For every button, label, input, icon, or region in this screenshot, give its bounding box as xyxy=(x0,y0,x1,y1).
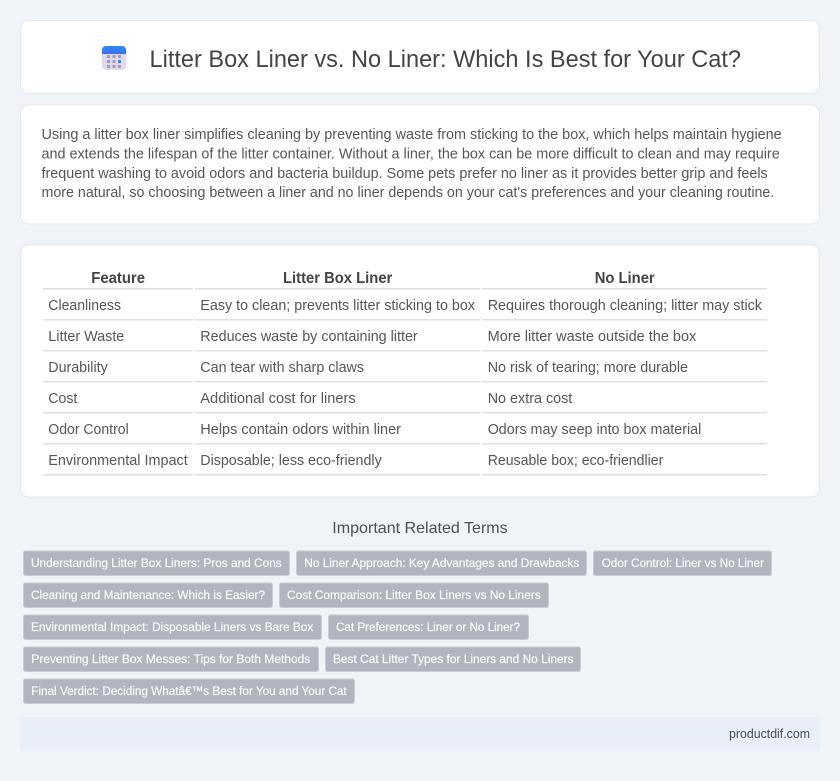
row: cost: Additional cost for liners xyxy=(200,391,356,407)
intro text: and extends the lifespan of the litter container. Without a liner, the box can be more difficult to clean and may require xyxy=(42,146,780,162)
tag xyxy=(24,551,290,576)
intro text xyxy=(42,127,782,201)
row: environmental impact: Reusable box; eco-friendlier xyxy=(488,453,663,469)
tag: Odor Control: Liner vs No Liner xyxy=(602,556,764,570)
tag xyxy=(280,583,548,608)
row: litter waste: Reduces waste by containing litter xyxy=(200,329,418,345)
row: litter waste: Litter Waste xyxy=(48,329,124,345)
heading: important related terms: Important Related Terms xyxy=(332,520,508,537)
tag: Environmental Impact: Disposable Liners vs Bare Box xyxy=(31,620,314,634)
intro text: Using a litter box liner simplifies cleaning by preventing waste from sticking to the box, which helps maintain hygiene xyxy=(42,127,782,143)
row: cost: Cost xyxy=(48,391,77,407)
table header row xyxy=(91,270,655,287)
row: odor control: Odors may seep into box material xyxy=(488,422,701,438)
row: environmental impact xyxy=(48,453,663,469)
row: odor control: Odor Control xyxy=(48,422,129,438)
tag: Final Verdict: Deciding Whatâ€™s Best for You and Your Cat xyxy=(31,684,347,698)
row: durability: Can tear with sharp claws xyxy=(200,360,364,376)
tag: Cat Preferences: Liner or No Liner? xyxy=(336,620,520,634)
row: odor control: Helps contain odors within liner xyxy=(200,422,401,438)
row: cost xyxy=(48,391,572,407)
tag xyxy=(24,679,354,704)
panel: introduction xyxy=(20,105,820,224)
tag xyxy=(594,551,772,576)
tag xyxy=(24,583,272,608)
row: odor control xyxy=(48,422,701,438)
row: cleanliness: Requires thorough cleaning; litter may stick xyxy=(488,298,763,314)
tag: Preventing Litter Box Messes: Tips for Both Methods xyxy=(31,652,310,666)
tag xyxy=(24,615,322,640)
title: Litter Box Liner vs. No Liner: Which Is Best for Your Cat? xyxy=(150,46,741,73)
intro text: frequent washing to avoid odors and bacteria buildup. Some pets prefer no liner as it provides better grip and feels xyxy=(42,166,768,182)
table header row: No Liner xyxy=(595,270,655,287)
tag xyxy=(326,647,580,672)
row: durability xyxy=(48,360,688,376)
row: litter waste: More litter waste outside the box xyxy=(488,329,697,345)
related term tags xyxy=(24,551,772,704)
tag xyxy=(296,551,586,576)
row: environmental impact: Disposable; less eco-friendly xyxy=(200,453,382,469)
row: litter waste xyxy=(48,329,697,345)
table header row: Feature xyxy=(91,270,145,287)
footer xyxy=(20,717,820,751)
row: cleanliness xyxy=(48,298,763,314)
tag xyxy=(328,615,528,640)
tag: Cost Comparison: Litter Box Liners vs No Liners xyxy=(287,588,541,602)
footer text: productdif.com xyxy=(729,727,810,741)
panel: header xyxy=(20,20,820,94)
intro text: more natural, so choosing between a liner and no liner depends on your cat's preferences and your cleaning routine. xyxy=(42,185,774,201)
tag: No Liner Approach: Key Advantages and Drawbacks xyxy=(304,556,579,570)
tag xyxy=(24,647,318,672)
panel: comparison table xyxy=(20,245,820,497)
row: cleanliness: Easy to clean; prevents litter sticking to box xyxy=(200,298,476,314)
row: environmental impact: Environmental Impact xyxy=(48,453,188,469)
row: durability: Durability xyxy=(48,360,108,376)
row: durability: No risk of tearing; more durable xyxy=(488,360,688,376)
tag: Cleaning and Maintenance: Which is Easier? xyxy=(31,588,265,602)
row: cost: No extra cost xyxy=(488,391,572,407)
tag: Best Cat Litter Types for Liners and No Liners xyxy=(333,652,574,666)
table header row: Litter Box Liner xyxy=(283,270,392,287)
icon: calendar xyxy=(102,46,126,70)
tag: Understanding Litter Box Liners: Pros and Cons xyxy=(31,556,282,570)
row: cleanliness: Cleanliness xyxy=(48,298,121,314)
